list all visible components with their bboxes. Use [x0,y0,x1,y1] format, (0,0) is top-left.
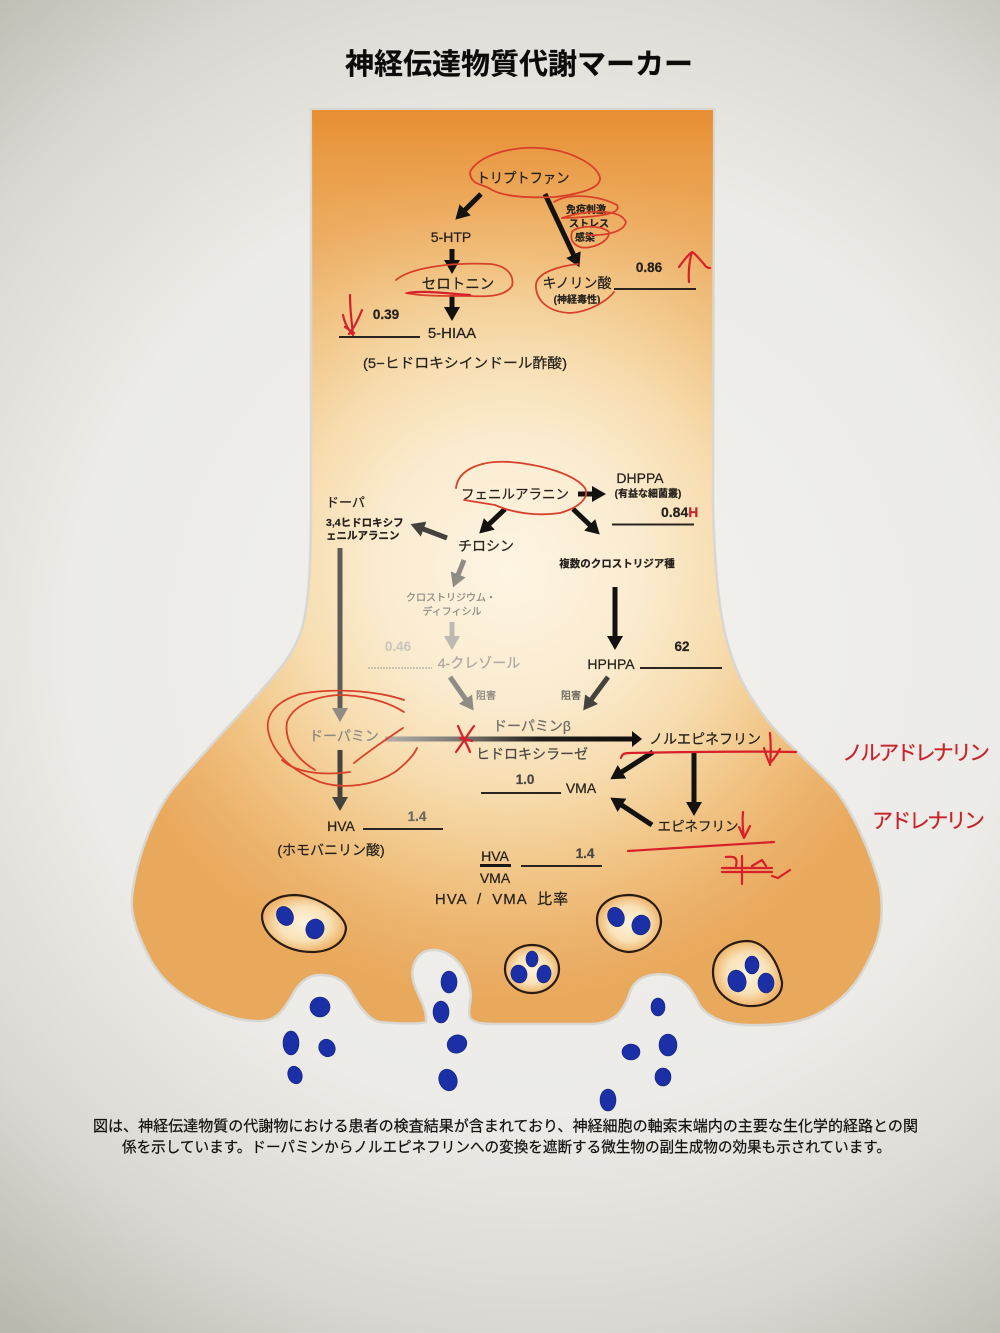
label: neurotoxic: (神経毒性) [554,293,600,306]
label: norepinephrine: ノルエピネフリン [649,731,761,747]
red annotations: phenylalanine oval [456,462,586,514]
arrow: tyrosine to dopa [418,527,447,538]
arrow: norepinephrine to epinephrine [692,752,696,808]
fraction: HVA over VMA [480,848,511,886]
arrow: serotonin to 5-HIAA [450,295,454,313]
vesicle 2 [597,895,661,952]
arrow: phenylalanine to tyrosine [485,509,505,528]
label: VMA: VMA [566,780,597,796]
value: 4-cresol 0.46: 0.46 [385,639,412,654]
arrow: phenylalanine to DHPPA [578,492,598,496]
dotted line: 4-cresol [368,667,432,669]
label: clostridium difficile: クロストリジウム・ [406,592,496,604]
vesicle 4 [713,941,782,1006]
label: infection: 感染 [575,231,595,244]
arrow: dopa to dopamine [338,548,342,714]
pathway: dopamine section [277,718,761,908]
arrow: phenylalanine to clostridia [573,509,594,529]
label: stress: ストレス [569,218,609,230]
label: hydroxylase: ヒドロキシラーゼ [476,746,588,762]
value: kynurenic acid 0.86: 0.86 [636,260,663,275]
arrow: tryptophan to 5-HTP [461,194,481,214]
label: tyrosine: チロシン [458,538,514,554]
arrow: tryptophan to kynurenic acid [545,194,576,260]
arrow: epinephrine to VMA [617,802,652,825]
fraction: HVA over VMA: VMA [480,870,511,886]
label: inhibition left: 阻害 [476,689,496,702]
label: HPHPA: HPHPA [587,656,635,672]
vesicles inside terminal [262,895,782,1006]
vesicle 1 [262,895,346,952]
value: DHPPA 0.84 H: 0.84H [661,504,698,520]
fraction: HVA over VMA: HVA [481,848,510,864]
arrow: tyrosine to C. difficile [456,560,464,580]
pathway: tryptophan section [339,170,696,371]
value: ratio 1.4: 1.4 [576,846,595,861]
label: dopamine beta: ドーパミンβ [493,718,571,734]
label: immune stimulation: 免疫刺激 [566,203,606,216]
label: homovanillic acid: (ホモバニリン酸) [277,842,385,858]
label: 5-HIAA: 5-HIAA [428,325,476,342]
label: difficile: ディフィシル [422,605,482,618]
value: HPHPA 62: 62 [674,639,690,654]
label: HVA VMA ratio: HVA / VMA 比率 [435,891,569,908]
value lines: phenylalanine section [612,524,722,668]
label: HVA: HVA [327,818,356,834]
arrow: dopamine to HVA [338,750,342,803]
panel: neuron axon terminal shape [132,109,882,1025]
arrow: 4-cresol inhibits enzyme [450,677,469,704]
label: dopamine: ドーパミン [309,728,379,744]
label: beneficial bacteria: (有益な細菌叢) [615,487,681,500]
label: inhibition right: 阻害 [561,689,581,702]
value: VMA 1.0: 1.0 [516,772,534,787]
handwritten note: adrenaline: アドレナリン [872,805,985,835]
arrow: C. difficile to 4-cresol [450,622,454,642]
handwritten note: noradrenaline: ノルアドレナリン [842,737,990,767]
pathway: phenylalanine section [326,470,722,714]
red annotations: tryptophan section [343,148,710,335]
label: tryptophan: トリプトファン [476,170,570,186]
arrow: clostridia to HPHPA [612,587,618,642]
label: DHPPA: DHPPA [616,470,664,486]
red annotations: dopamine section [268,691,796,884]
label: dihydroxyphenylalanine: 3,4ヒドロキシフ [326,517,404,529]
arrow: 5-HTP to serotonin [450,249,454,266]
value: HVA 1.4: 1.4 [408,809,427,824]
label: 5-hydroxyindoleacetic acid: (5−ヒドロキシインドール酢酸) [363,355,567,371]
arrow: norepinephrine to VMA [617,752,653,775]
caption: 係を示しています。ドーパミンからノルエピネフリンへの変換を遮断する微生物の副生成物の効果も示されています。 [122,1139,891,1156]
value lines: tryptophan section [339,289,696,337]
label: 5-HTP: 5-HTP [431,229,471,245]
label: dihydroxyphenylalanine continued: ェニルアラニン [326,530,400,542]
label: epinephrine: エピネフリン [658,819,738,834]
title: 神経伝達物質代謝マーカー [345,48,693,81]
caption [93,1117,918,1156]
label: kynurenic acid: キノリン酸 [542,275,612,291]
label: 4-cresol: 4-クレゾール [438,655,520,671]
value lines: dopamine section [363,793,602,866]
caption: 図は、神経伝達物質の代謝物における患者の検査結果が含まれており、神経細胞の軸索末端内の主要な生化学的経路との関 [93,1117,918,1135]
label: dopa: ドーパ [326,495,365,510]
label: phenylalanine: フェニルアラニン [461,487,569,502]
vesicle 3 [505,945,559,993]
arrow: HPHPA inhibits enzyme [588,677,608,704]
value: 5-HIAA 0.39: 0.39 [373,307,399,322]
released neurotransmitter droplets [283,971,677,1111]
label: serotonin: セロトニン [422,277,494,293]
label: multiple clostridia species: 複数のクロストリジア種 [559,557,675,570]
arrow: dopamine to norepinephrine [385,731,642,747]
